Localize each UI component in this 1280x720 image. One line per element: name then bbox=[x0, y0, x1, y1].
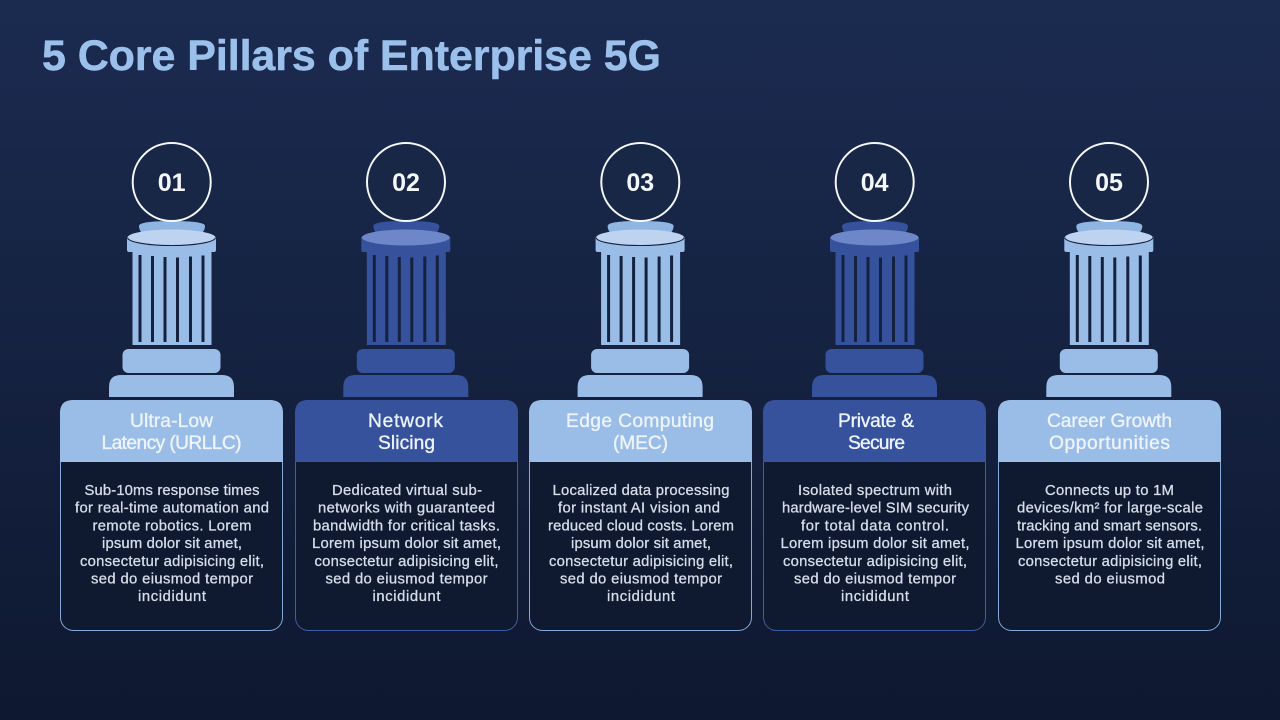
card 2 header bbox=[295, 400, 518, 462]
card 4 header bbox=[763, 400, 986, 462]
pillar 3 column bbox=[578, 221, 703, 397]
panel: card 2 bbox=[295, 400, 518, 630]
card 4 body text: Lorem ipsum dolor sit amet, bbox=[780, 536, 970, 552]
card 1 body text: sed do eiusmod tempor bbox=[91, 571, 253, 587]
card 3 body text: ipsum dolor sit amet, bbox=[571, 536, 711, 552]
card 1 body text: for real-time automation and bbox=[75, 501, 269, 517]
card 3 body text bbox=[548, 483, 734, 605]
card 5 header bbox=[998, 400, 1221, 462]
number badge 05: 05 bbox=[1095, 169, 1123, 197]
number badge 04: 04 bbox=[861, 169, 889, 197]
pillar 1 bbox=[109, 143, 234, 397]
card 2 body text: Lorem ipsum dolor sit amet, bbox=[312, 536, 501, 552]
number badge 03 bbox=[601, 143, 679, 221]
number badge 02: 02 bbox=[392, 169, 420, 197]
card 3 body text: incididunt bbox=[607, 589, 675, 605]
card 1 body text: remote robotics. Lorem bbox=[92, 518, 252, 534]
card 1 body text bbox=[75, 483, 269, 605]
pillar 1 column bbox=[109, 221, 234, 397]
card 3 body text: reduced cloud costs. Lorem bbox=[548, 518, 734, 534]
pillar 5 column bbox=[1046, 221, 1171, 397]
card 5 header: Career Growth bbox=[1047, 411, 1172, 432]
card 1 body text: Sub-10ms response times bbox=[84, 483, 260, 499]
panel: card 4 bbox=[763, 400, 986, 630]
card 5 body text: Lorem ipsum dolor sit amet, bbox=[1016, 536, 1204, 552]
card 2 header: Slicing bbox=[378, 433, 435, 454]
card 2 body text: networks with guaranteed bbox=[318, 501, 495, 517]
number badge 04 bbox=[836, 143, 914, 221]
card 5 body text: sed do eiusmod bbox=[1055, 571, 1165, 587]
number badge 01: 01 bbox=[158, 169, 186, 197]
card 2 body text: bandwidth for critical tasks. bbox=[313, 518, 500, 534]
card 1 body text: incididunt bbox=[138, 589, 206, 605]
card 4 header: Secure bbox=[848, 433, 905, 454]
card 4 header: Private & bbox=[838, 411, 914, 432]
title: 5 Core Pillars of Enterprise 5G bbox=[42, 32, 661, 80]
card 3 body text: sed do eiusmod tempor bbox=[560, 571, 722, 587]
card 4 body text: for total data control. bbox=[801, 518, 949, 534]
card 5 body text bbox=[1016, 483, 1204, 587]
card 2 header: Network bbox=[368, 411, 443, 432]
pillar 2 column bbox=[343, 221, 468, 397]
number badge 03: 03 bbox=[626, 169, 654, 197]
card 2 body text bbox=[312, 483, 501, 605]
card 3 body text: for instant AI vision and bbox=[558, 501, 720, 517]
pillar 3 bbox=[578, 143, 703, 397]
panel: card 1 bbox=[60, 400, 283, 630]
card 5 body text: Connects up to 1M bbox=[1045, 483, 1174, 499]
card 3 body text: consectetur adipisicing elit, bbox=[549, 554, 733, 570]
card 4 body text: sed do eiusmod tempor bbox=[794, 571, 956, 587]
card 4 body text: consectetur adipisicing elit, bbox=[783, 554, 967, 570]
card 5 header: Opportunities bbox=[1049, 433, 1170, 454]
card 1 body text: consectetur adipisicing elit, bbox=[80, 554, 264, 570]
card 1 body text: ipsum dolor sit amet, bbox=[102, 536, 242, 552]
card 2 body text: incididunt bbox=[372, 589, 440, 605]
card 1 header bbox=[60, 400, 283, 462]
pillar 4 bbox=[812, 143, 937, 397]
card 5 body text: devices/km² for large-scale bbox=[1017, 501, 1203, 517]
card 3 header: (MEC) bbox=[613, 433, 668, 454]
card 3 body text: Localized data processing bbox=[552, 483, 730, 499]
number badge 01 bbox=[133, 143, 211, 221]
pillar 4 column bbox=[812, 221, 937, 397]
card 5 body text: tracking and smart sensors. bbox=[1017, 518, 1202, 534]
pillar 5 bbox=[1046, 143, 1171, 397]
card 3 header bbox=[529, 400, 752, 462]
number badge 02 bbox=[367, 143, 445, 221]
card 2 body text: sed do eiusmod tempor bbox=[326, 571, 488, 587]
number badge 05 bbox=[1070, 143, 1148, 221]
card 4 body text: Isolated spectrum with bbox=[798, 483, 952, 499]
pillar 2 bbox=[343, 143, 468, 397]
card 2 body text: Dedicated virtual sub- bbox=[332, 483, 482, 499]
card 4 body text bbox=[780, 483, 970, 605]
panel: card 3 bbox=[529, 400, 752, 630]
card 3 header: Edge Computing bbox=[566, 411, 714, 432]
card 2 body text: consectetur adipisicing elit, bbox=[314, 554, 498, 570]
card 5 body text: consectetur adipisicing elit, bbox=[1018, 554, 1202, 570]
card 4 body text: incididunt bbox=[841, 589, 909, 605]
card 4 body text: hardware-level SIM security bbox=[782, 501, 970, 517]
card 1 header: Ultra-Low bbox=[130, 411, 213, 432]
card 1 header: Latency (URLLC) bbox=[102, 433, 242, 454]
panel: card 5 bbox=[998, 400, 1221, 630]
